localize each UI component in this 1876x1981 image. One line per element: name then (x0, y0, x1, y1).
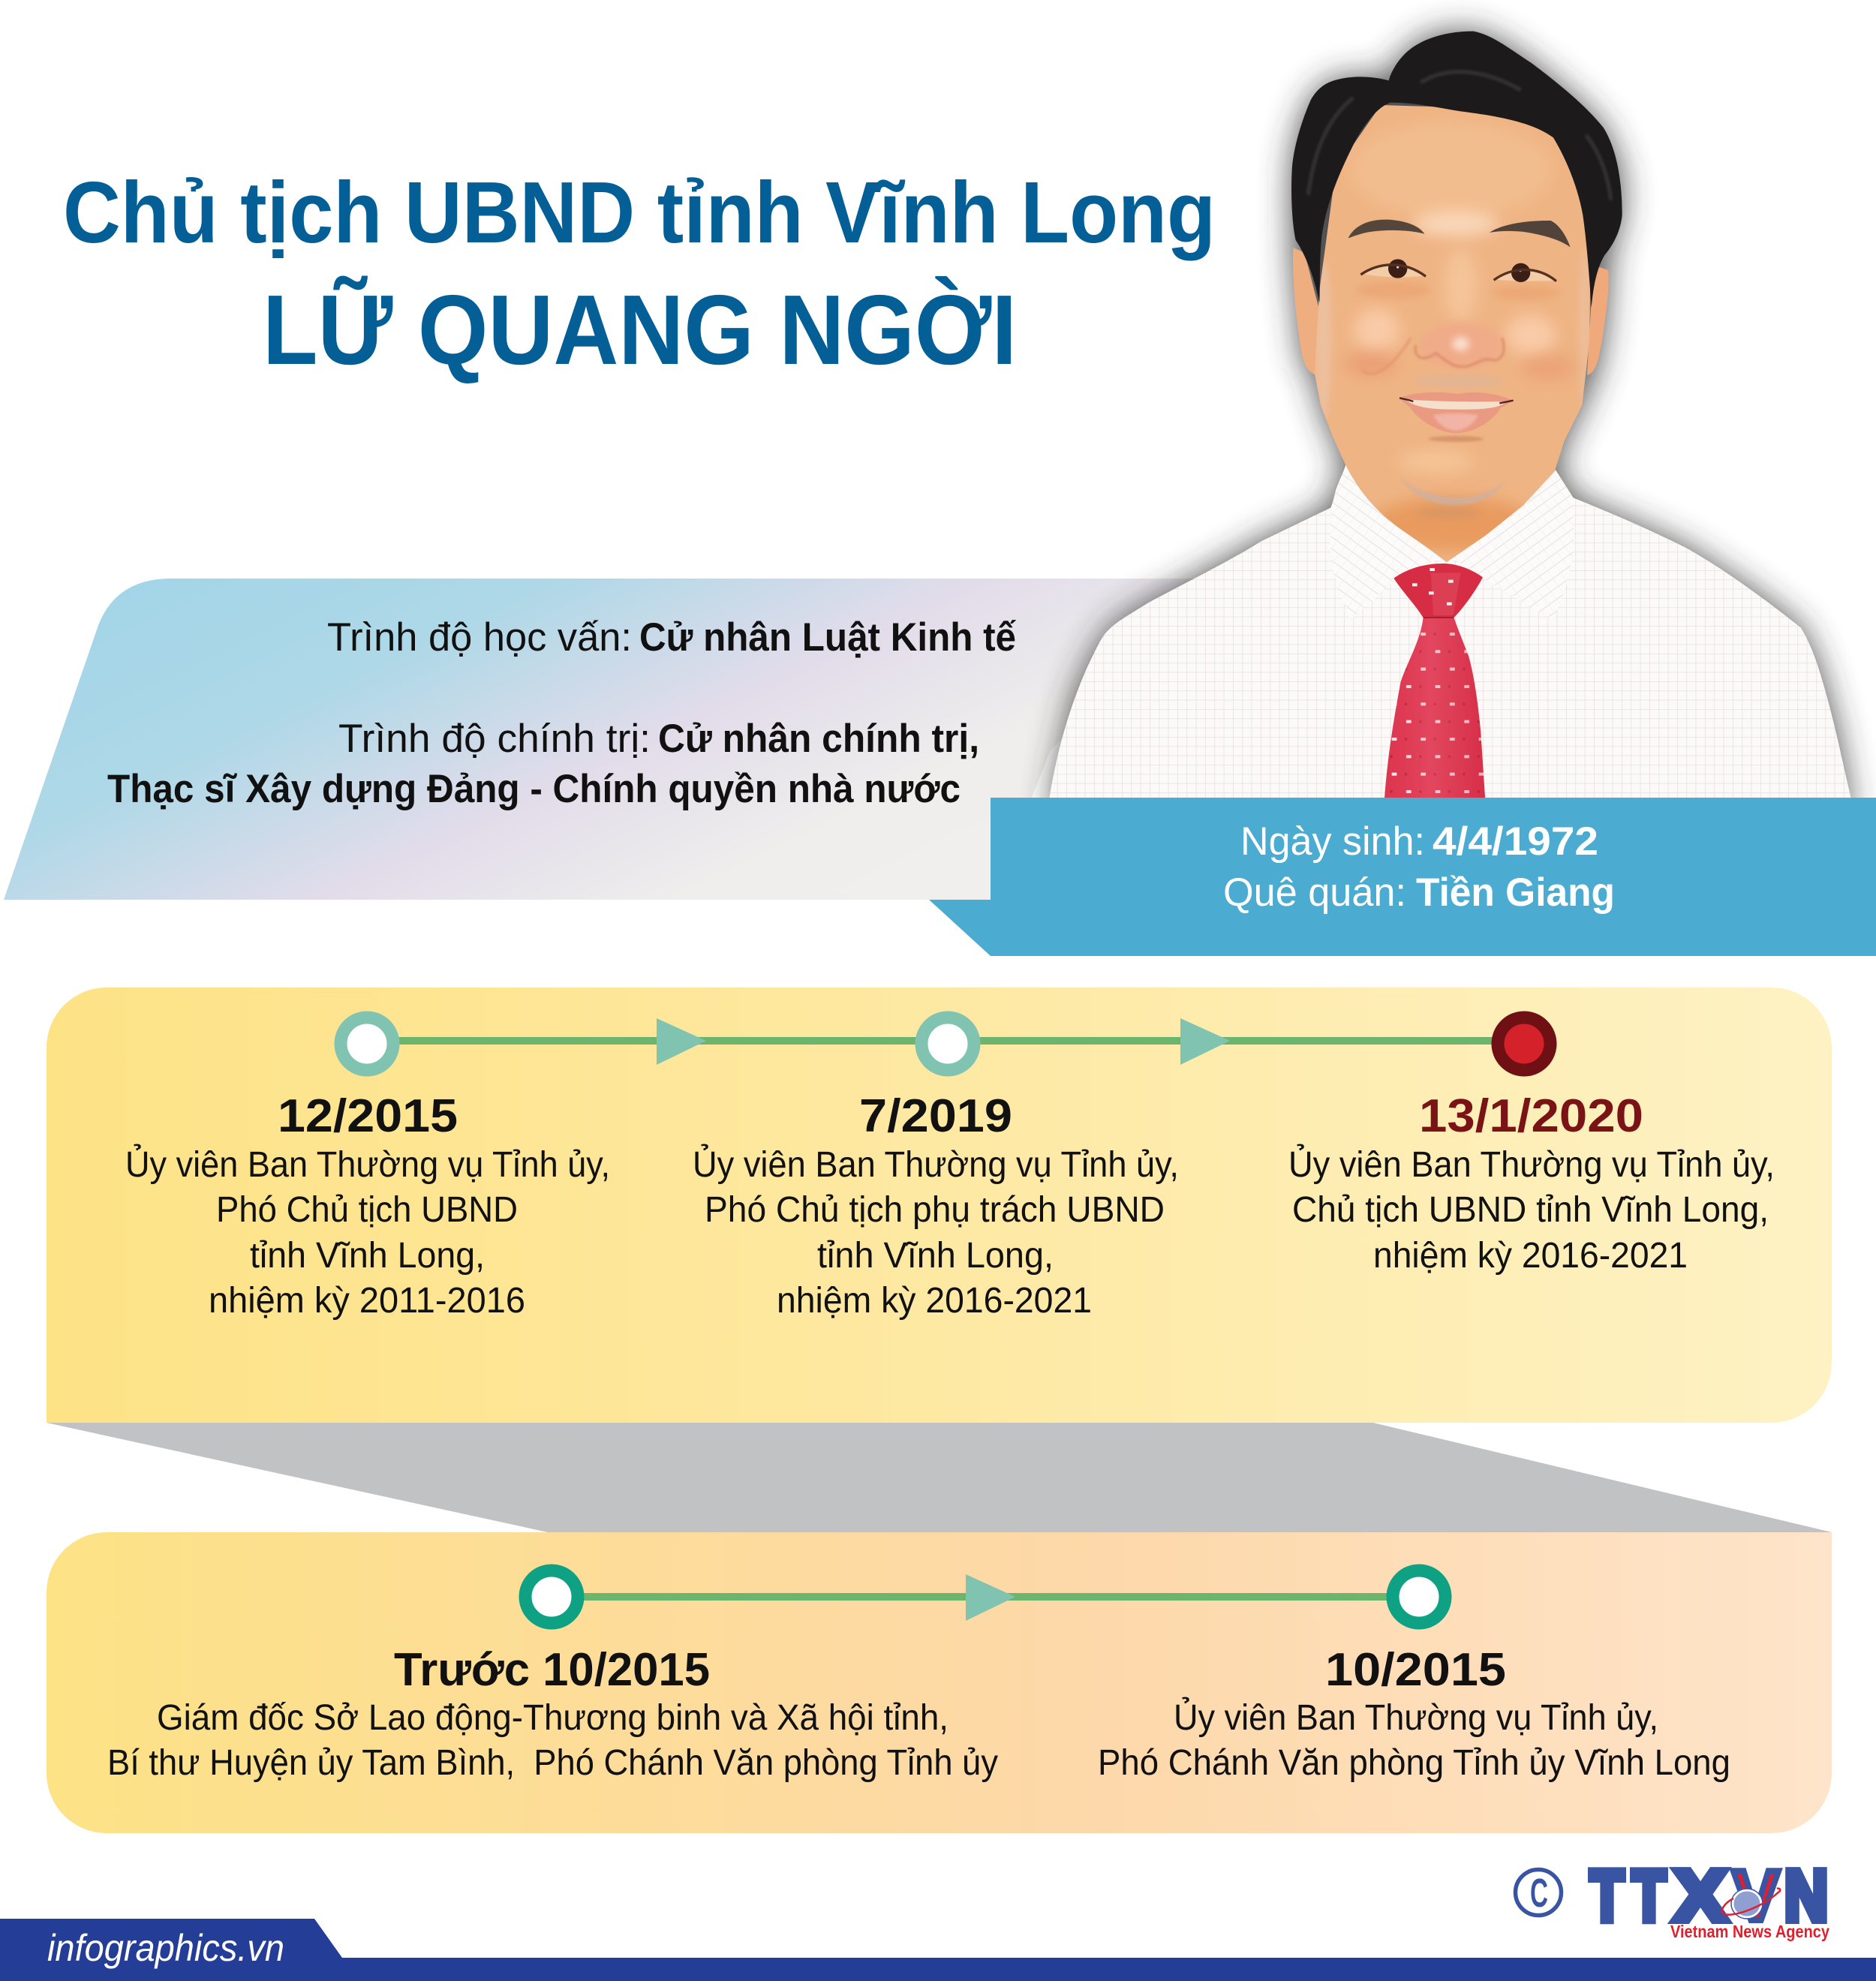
connector: grey fold (47, 1423, 1832, 1532)
logo: TTXVN: T (1590, 1856, 1624, 1936)
footer bar (0, 1919, 1876, 1981)
entry 12/2015 (125, 1090, 610, 1321)
entry before 10/2015: Trước 10/2015 (394, 1644, 710, 1696)
entry 7/2019: Phó Chủ tịch phụ trách UBND (705, 1190, 1165, 1230)
title: Chủ tịch UBND tỉnh Vĩnh Long (63, 164, 1216, 261)
title (63, 164, 1216, 385)
logo: TTXVN: X (1674, 1856, 1727, 1936)
panel: birth and hometown band: Quê quán: (1223, 870, 1406, 915)
entry 12/2015: Phó Chủ tịch UBND (216, 1190, 518, 1230)
collar (1330, 465, 1574, 621)
nose (1415, 338, 1504, 367)
panel: birth and hometown band (929, 798, 1876, 956)
timeline line (552, 1593, 1418, 1601)
entry 13/1/2020 (1288, 1090, 1775, 1276)
panel: education text: Thạc sĩ Xây dựng Đảng - Chính quyền nhà nước (107, 767, 961, 811)
panel: education background (4, 579, 1216, 900)
entry 7/2019 (693, 1090, 1179, 1321)
logo: TTXVN: T (1632, 1856, 1666, 1936)
node 2 (1393, 1571, 1445, 1623)
shirt (1049, 465, 1851, 801)
panel: education text: Cử nhân chính trị, (658, 717, 979, 761)
arrow 1 (657, 1018, 706, 1065)
entry 12/2015: nhiệm kỳ 2011-2016 (209, 1281, 525, 1321)
portrait shadow (1051, 32, 1851, 816)
arrow (966, 1574, 1015, 1621)
entry 7/2019: tỉnh Vĩnh Long, (817, 1236, 1054, 1276)
panel: education text: Trình độ học vấn: (327, 615, 632, 660)
globe (1733, 1890, 1761, 1917)
orbit (1722, 1889, 1780, 1915)
footer bar: infographics.vn (47, 1927, 284, 1969)
portrait photo (1049, 32, 1851, 816)
node 2 (921, 1018, 974, 1070)
panel: lower timeline (47, 1532, 1832, 1833)
entry 7/2019: 7/2019 (859, 1090, 1012, 1142)
title: LỮ QUANG NGỜI (263, 275, 1017, 385)
hair highlights (1308, 72, 1611, 200)
ears (1293, 248, 1609, 375)
cheek fold (1362, 338, 1411, 374)
eyes (1360, 259, 1556, 282)
entry before 10/2015: Bí thư Huyện ủy Tam Bình, Phó Chánh Văn phòng Tỉnh ủy (107, 1743, 998, 1783)
entry 13/1/2020: 13/1/2020 (1419, 1090, 1643, 1142)
entry before 10/2015 (107, 1644, 998, 1783)
logo: TTXVN: V (1733, 1856, 1779, 1936)
panel: birth and hometown band: 4/4/1972 (1433, 819, 1598, 864)
entry 12/2015: Ủy viên Ban Thường vụ Tỉnh ủy, (125, 1144, 610, 1185)
logo: TTXVN (1590, 1856, 1829, 1941)
panel: education text: Cử nhân Luật Kinh tế (639, 615, 1016, 660)
entry 10/2015: Phó Chánh Văn phòng Tỉnh ủy Vĩnh Long (1098, 1743, 1730, 1783)
entry 10/2015: Ủy viên Ban Thường vụ Tỉnh ủy, (1174, 1697, 1658, 1738)
panel: education text (107, 615, 1016, 811)
icon: copyright: C (1530, 1871, 1548, 1916)
panel: birth and hometown band: Tiền Giang (1416, 870, 1615, 915)
entry 10/2015 (1098, 1644, 1730, 1783)
arrow 2 (1180, 1018, 1230, 1065)
entry before 10/2015: Giám đốc Sở Lao động-Thương binh và Xã hội tỉnh, (157, 1698, 949, 1738)
logo: TTXVN: N (1784, 1856, 1828, 1936)
entry 13/1/2020: nhiệm kỳ 2016-2021 (1373, 1236, 1688, 1276)
icon: copyright (1516, 1870, 1561, 1916)
entry 7/2019: nhiệm kỳ 2016-2021 (777, 1281, 1092, 1321)
panel: upper timeline (47, 987, 1832, 1423)
entry 10/2015: 10/2015 (1325, 1644, 1506, 1696)
entry 7/2019: Ủy viên Ban Thường vụ Tỉnh ủy, (693, 1144, 1179, 1185)
node 1 (341, 1018, 393, 1070)
mouth (1399, 392, 1514, 433)
face (1315, 105, 1590, 563)
hair (1291, 32, 1622, 308)
eyebrows (1348, 220, 1571, 247)
entry 12/2015: tỉnh Vĩnh Long, (250, 1236, 485, 1276)
panel: education text: Trình độ chính trị: (338, 717, 651, 761)
agency name: Vietnam News Agency (1670, 1922, 1829, 1941)
node 1 (525, 1571, 578, 1623)
entry 12/2015: 12/2015 (278, 1090, 458, 1142)
entry 13/1/2020: Chủ tịch UBND tỉnh Vĩnh Long, (1292, 1190, 1769, 1230)
timeline line (367, 1037, 1524, 1045)
panel: birth and hometown band: Ngày sinh: (1240, 819, 1425, 864)
node 3 (1498, 1018, 1550, 1070)
entry 13/1/2020: Ủy viên Ban Thường vụ Tỉnh ủy, (1288, 1144, 1775, 1185)
tie (1384, 564, 1485, 801)
